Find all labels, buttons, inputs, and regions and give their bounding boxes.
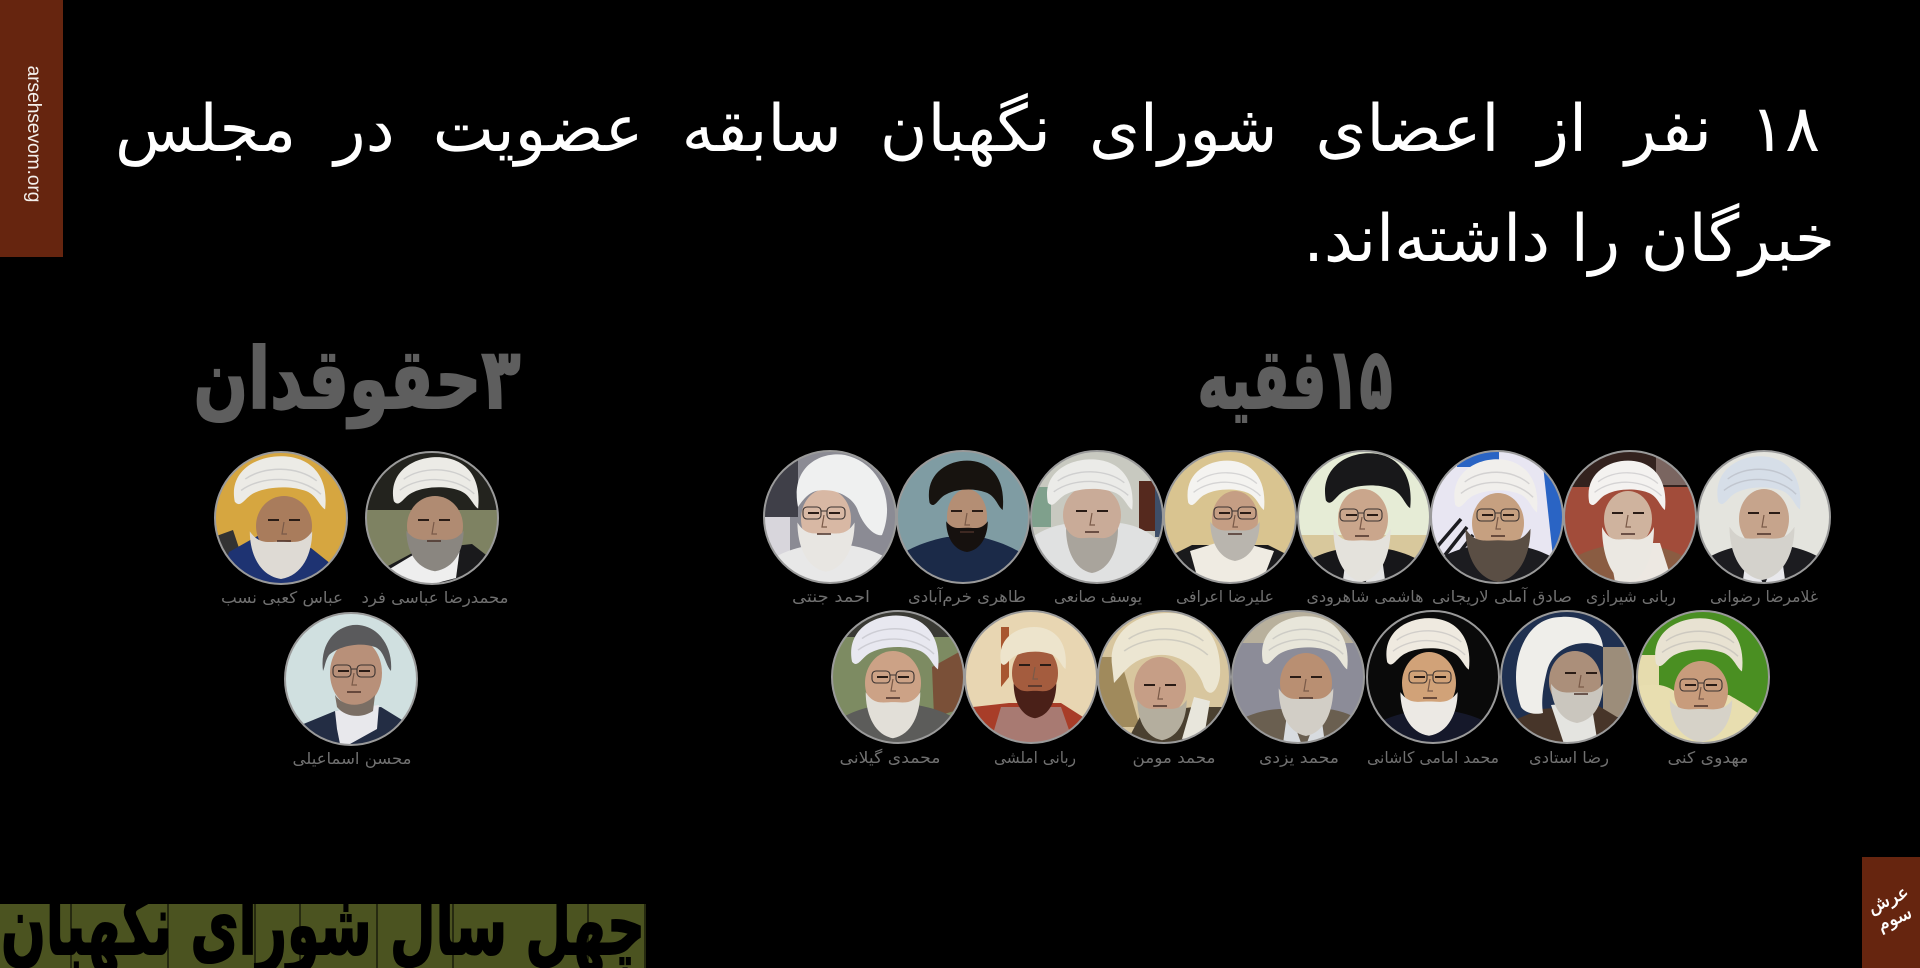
portrait: Mohsen Esmaeili: [281, 609, 421, 769]
name: یوسف صانعی: [1054, 587, 1142, 607]
portrait: Mohammad Yazdi: [1228, 607, 1368, 768]
name: ربانی املشی: [994, 748, 1076, 768]
name: مهدوی کنی: [1668, 748, 1748, 768]
portrait: Mohammad Momen: [1094, 607, 1234, 768]
portrait: Rabbani Shirazi: [1560, 447, 1700, 607]
name: محسن اسماعیلی: [292, 749, 412, 769]
logo mark: [1865, 882, 1920, 936]
portrait: Alireza Arafi: [1160, 447, 1300, 607]
portrait: Mohammadreza Abbasi-Fard: [362, 448, 508, 608]
portrait: Hashemi Shahroudi: [1294, 447, 1434, 607]
name: ربانی شیرازی: [1586, 587, 1676, 607]
portrait: Reza Ostadi: [1497, 607, 1637, 768]
portrait: Taheri Khorramabadi: [893, 447, 1033, 607]
panel: series banner: [0, 904, 646, 968]
name: احمد جنتی: [792, 587, 870, 606]
name: محمد یزدی: [1259, 748, 1339, 768]
heading: 3 jurists: ۳حقوقدان: [194, 330, 520, 429]
portrait: Mahdavi Kani: [1633, 607, 1773, 768]
portrait: Abbas Kaabi Nasab: [211, 448, 351, 607]
name: محمد مومن: [1132, 748, 1216, 768]
portrait: Yousef Sanei: [1027, 447, 1167, 607]
portrait: Sadegh Amoli Larijani: [1427, 447, 1572, 607]
name: هاشمی شاهرودی: [1306, 587, 1424, 607]
portrait: Rabbani Amlashi: [961, 607, 1101, 768]
site address: arsehsevom.org: [23, 66, 45, 202]
name: غلامرضا رضوانی: [1710, 587, 1818, 607]
name: محمدرضا عباسی فرد: [362, 588, 508, 608]
title line 1: ۱۸ نفر از اعضای شورای نگهبان سابقه عضویت در مجلس: [115, 92, 1820, 167]
name: محمدی گیلانی: [840, 748, 940, 767]
panel: site tab: [0, 0, 63, 257]
portrait: Mohammadi Gilani: [828, 607, 968, 767]
name: علیرضا اعرافی: [1176, 587, 1274, 607]
name: محمد امامی کاشانی: [1367, 748, 1499, 767]
portrait: Gholamreza Rezvani: [1694, 447, 1834, 607]
heading: 15 faqih: ۱۵فقیه: [1198, 330, 1392, 428]
portrait: Ahmad Jannati: [760, 447, 900, 606]
portrait: Mohammad Emami Kashani: [1363, 607, 1503, 767]
logo mark: سوم: [1874, 902, 1915, 936]
name: عباس کعبی نسب: [221, 588, 343, 607]
name: طاهری خرم‌آبادی: [908, 587, 1026, 607]
panel: logo tab: [1862, 857, 1920, 968]
name: رضا استادی: [1529, 748, 1609, 768]
title line 2: خبرگان را داشته‌اند.: [1303, 202, 1835, 277]
logo mark: عرش: [1865, 882, 1912, 918]
name: صادق آملی لاریجانی: [1432, 587, 1572, 607]
